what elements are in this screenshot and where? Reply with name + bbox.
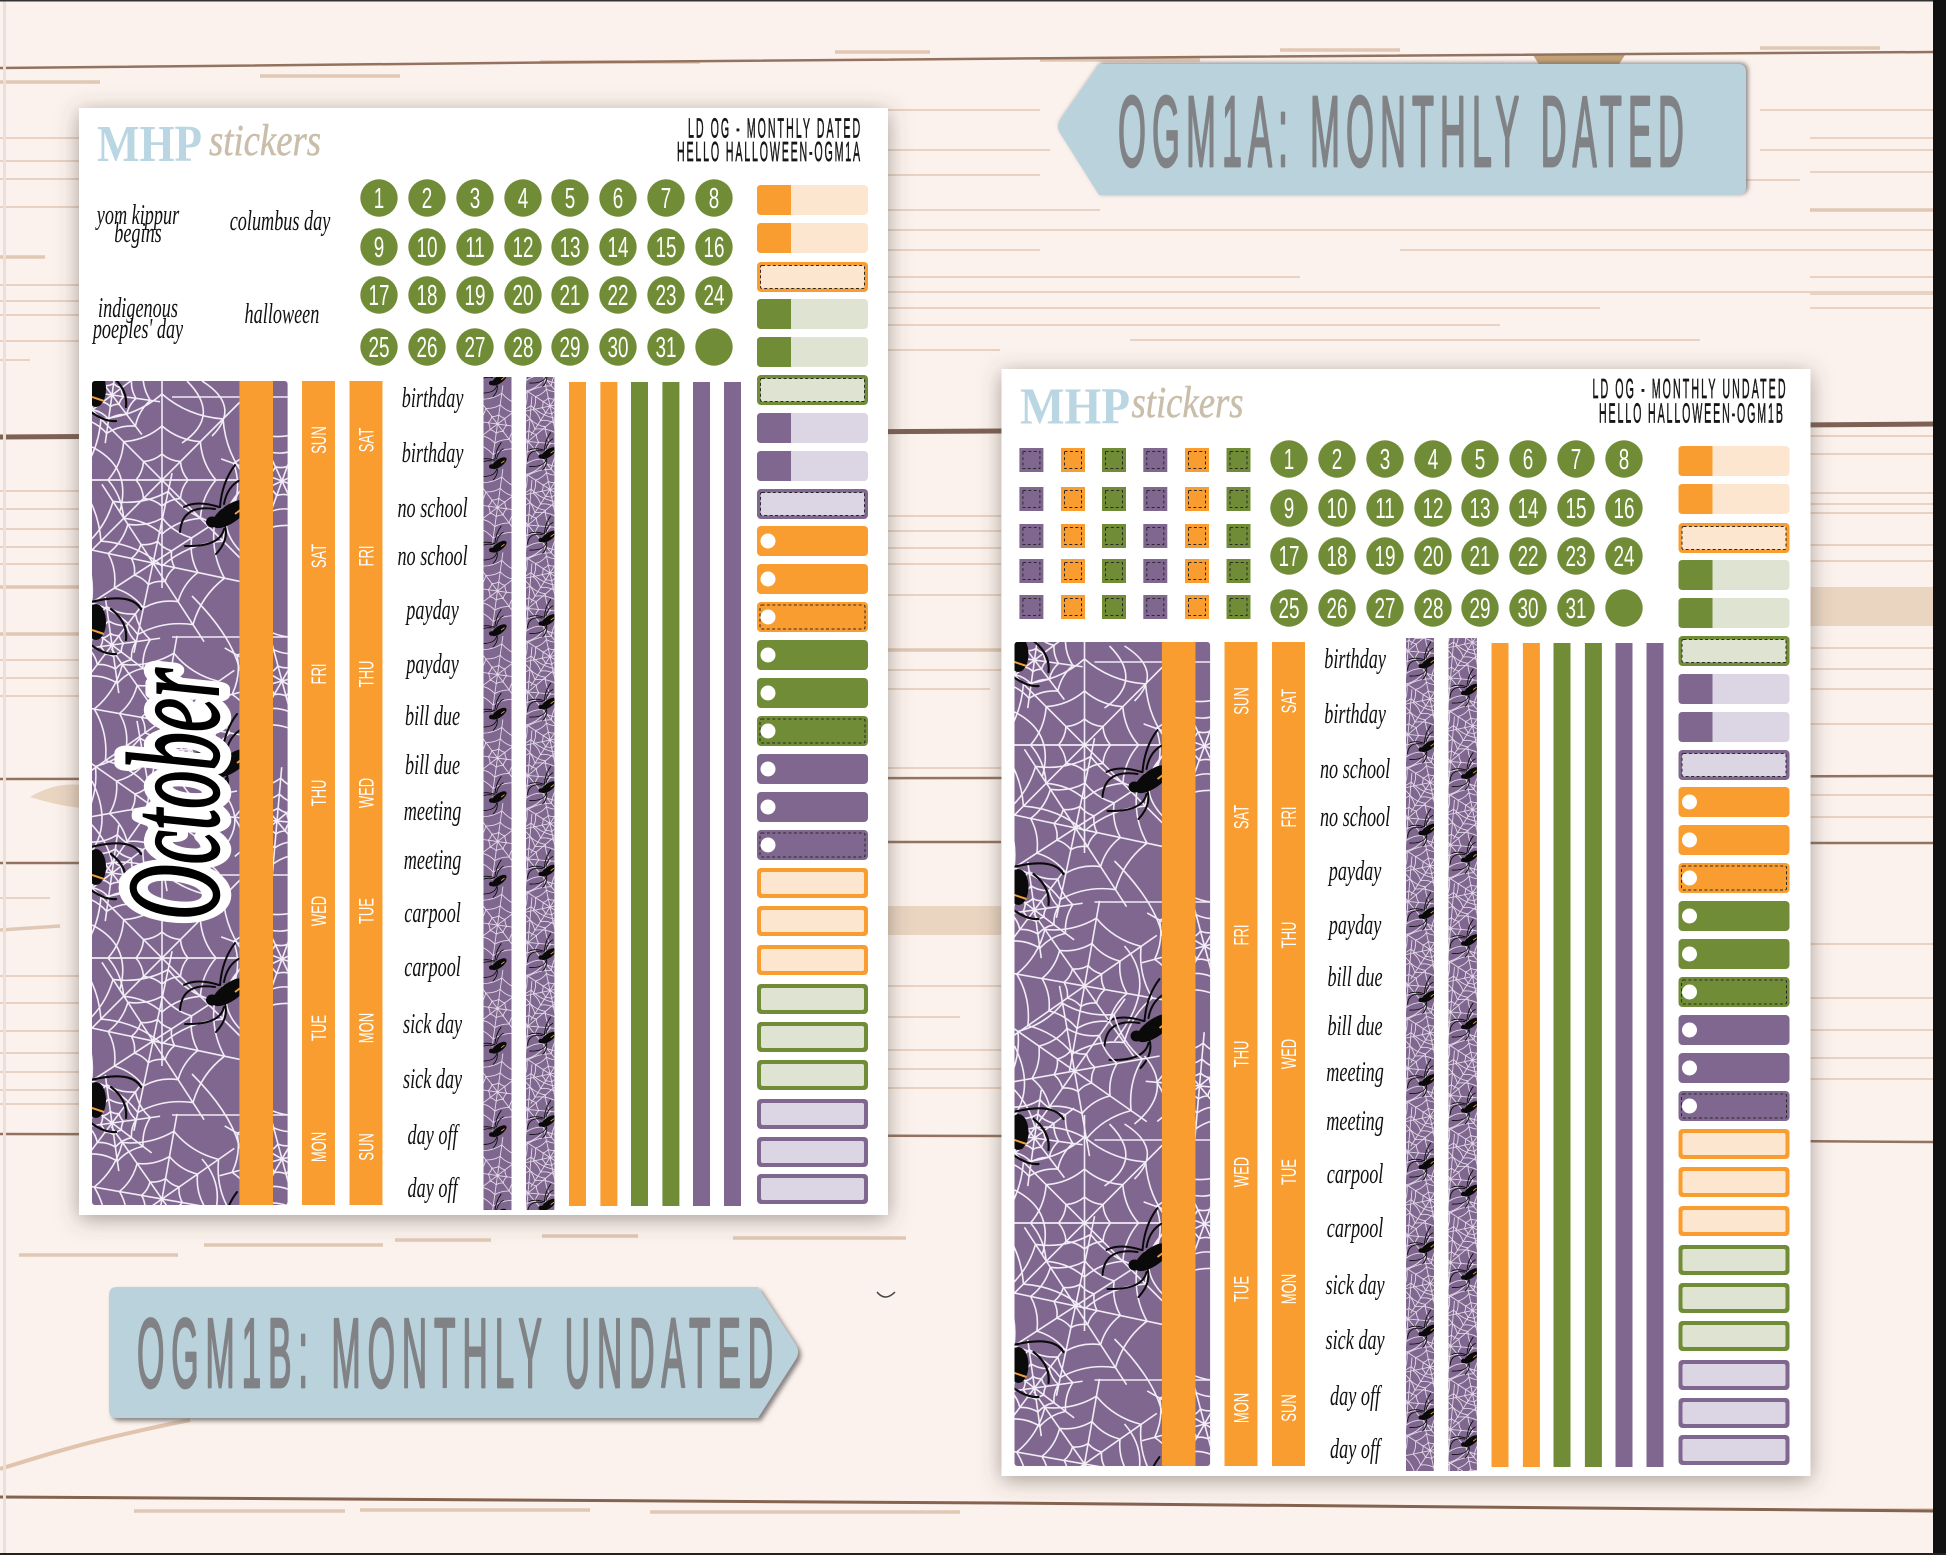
weekday strip: sunday start xyxy=(302,381,335,1205)
date circles 1 to 31: 7 xyxy=(661,183,671,215)
date circles 1 to 31: 20 xyxy=(513,280,533,312)
logo: MHP xyxy=(97,116,202,173)
event script labels: bill due xyxy=(405,750,460,781)
weekday strip: monday start: SUN xyxy=(1277,1394,1301,1422)
event script labels: carpool xyxy=(1327,1213,1384,1244)
weekday strip: monday start xyxy=(1272,642,1305,1466)
weekday strip: monday start: SAT xyxy=(354,428,378,452)
weekday strip: sunday start: TUE xyxy=(307,1015,331,1041)
weekday strip: sunday start: WED xyxy=(307,896,331,926)
logo: stickers xyxy=(209,116,321,165)
weekday strip: sunday start: SAT xyxy=(307,544,331,568)
event script labels: no school xyxy=(397,541,468,572)
weekday strip: sunday start: WED xyxy=(1229,1157,1253,1187)
date circles 1 to 31: 29 xyxy=(1470,593,1490,625)
sheet paper xyxy=(79,108,888,1215)
event script labels: bill due xyxy=(1328,962,1383,993)
date circles 1 to 31: 30 xyxy=(1518,593,1538,625)
weekday strip: monday start: TUE xyxy=(354,898,378,924)
weekday strip: sunday start: MON xyxy=(1229,1393,1253,1423)
date circles 1 to 31: 12 xyxy=(1423,493,1443,525)
date circles 1 to 31: 30 xyxy=(608,332,628,364)
date circles 1 to 31: 22 xyxy=(608,280,628,312)
weekday strip: sunday start: SUN xyxy=(1229,687,1253,715)
date circles 1 to 31: 10 xyxy=(417,232,437,264)
weekday strip: sunday start: FRI xyxy=(307,664,331,684)
holiday script labels: columbus day xyxy=(230,206,331,237)
date circles 1 to 31: 8 xyxy=(1619,444,1629,476)
sheet title: LD OG - MONTHLY DATED xyxy=(688,114,860,144)
spider web banner strip xyxy=(1014,642,1210,1466)
weekday strip: monday start: WED xyxy=(1277,1039,1301,1069)
event script labels: sick day xyxy=(403,1009,463,1040)
holiday script labels: poeples' day xyxy=(91,314,184,345)
date circles 1 to 31: 7 xyxy=(1571,444,1581,476)
event script labels: carpool xyxy=(404,952,461,983)
logo: MHP xyxy=(1020,378,1130,436)
date circles 1 to 31 xyxy=(360,179,733,366)
weekday strip: sunday start: SAT xyxy=(1229,805,1253,829)
date circles 1 to 31: 9 xyxy=(374,232,384,264)
weekday strip: monday start: THU xyxy=(1277,922,1301,948)
date circles 1 to 31: 6 xyxy=(613,183,623,215)
event script labels: bill due xyxy=(405,701,460,732)
date circles 1 to 31: 14 xyxy=(1518,493,1538,525)
label sticker column xyxy=(757,185,868,1204)
date circles 1 to 31: 3 xyxy=(470,183,480,215)
colored stripe strips xyxy=(569,382,741,1206)
event script labels: payday xyxy=(1327,856,1382,887)
event script labels: sick day xyxy=(1326,1270,1385,1301)
weekday strip: sunday start: THU xyxy=(307,780,331,806)
spider web banner strip with month name xyxy=(92,381,288,1205)
sheet title: LD OG - MONTHLY UNDATED xyxy=(1592,374,1786,405)
date circles 1 to 31: 6 xyxy=(1523,444,1533,476)
event script labels: payday xyxy=(405,649,459,680)
holiday script labels: yom kippur xyxy=(95,200,180,231)
event script labels: birthday xyxy=(1324,644,1386,675)
date circles 1 to 31: 27 xyxy=(465,332,485,364)
date circles 1 to 31: 20 xyxy=(1423,541,1443,573)
holiday script labels xyxy=(91,200,331,345)
weekday strip: sunday start: SUN xyxy=(307,426,331,454)
date circles 1 to 31: 18 xyxy=(417,280,437,312)
banner: OGM1A monthly dated: OGM1A: MONTHLY DATED xyxy=(1118,76,1684,187)
weekday strip: monday start: THU xyxy=(354,661,378,687)
event script labels: meeting xyxy=(1326,1106,1384,1137)
date circles 1 to 31: 15 xyxy=(656,232,676,264)
date circles 1 to 31: 11 xyxy=(465,232,485,264)
date circles 1 to 31: 23 xyxy=(656,280,676,312)
weekday strip: monday start: SAT xyxy=(1277,689,1301,713)
date circles 1 to 31: 28 xyxy=(1423,593,1443,625)
sheet title xyxy=(1592,374,1786,429)
weekday strip: monday start: MON xyxy=(1277,1274,1301,1304)
logo: stickers xyxy=(1132,378,1244,427)
date circles 1 to 31: 5 xyxy=(565,183,575,215)
date circles 1 to 31: 31 xyxy=(656,332,676,364)
weekday strip: sunday start: MON xyxy=(307,1132,331,1162)
date circles 1 to 31: 4 xyxy=(1428,444,1438,476)
date circles 1 to 31: 2 xyxy=(422,183,432,215)
date circles 1 to 31: 13 xyxy=(1470,493,1490,525)
date circles 1 to 31: 19 xyxy=(465,280,485,312)
sheet paper xyxy=(1002,369,1810,1476)
date circles 1 to 31: 1 xyxy=(1284,444,1294,476)
date circles 1 to 31: 24 xyxy=(1614,541,1635,573)
event script labels: day off xyxy=(1330,1434,1383,1465)
holiday script labels: begins xyxy=(114,218,162,249)
event script labels: payday xyxy=(1327,910,1382,941)
narrow web washi strips xyxy=(1406,638,1477,1471)
event script labels: birthday xyxy=(402,383,464,414)
weekday strip: monday start: FRI xyxy=(354,546,378,567)
date circles 1 to 31: 29 xyxy=(560,332,580,364)
date circles 1 to 31: 21 xyxy=(1470,541,1490,573)
event script labels: sick day xyxy=(1326,1325,1385,1356)
date circles 1 to 31: 22 xyxy=(1518,541,1538,573)
weekday strip: sunday start: TUE xyxy=(1229,1276,1253,1302)
date circles 1 to 31: 17 xyxy=(369,280,389,312)
event script labels: day off xyxy=(1330,1381,1383,1412)
date circles 1 to 31: 8 xyxy=(709,183,719,215)
weekday strip: sunday start: FRI xyxy=(1229,925,1253,945)
weekday strip: monday start: WED xyxy=(354,778,378,808)
label sticker column xyxy=(1678,446,1790,1465)
date circles 1 to 31: 23 xyxy=(1566,541,1586,573)
date circles 1 to 31: 27 xyxy=(1375,593,1395,625)
event script labels: birthday xyxy=(402,438,464,469)
event script labels: payday xyxy=(405,595,459,626)
holiday script labels: halloween xyxy=(245,299,319,330)
weekday strip: monday start: SUN xyxy=(354,1133,378,1161)
date circles 1 to 31: 16 xyxy=(1614,493,1635,525)
weekday strip: sunday start xyxy=(1224,642,1258,1466)
sheet title: HELLO HALLOWEEN-OGM1B xyxy=(1599,399,1783,429)
date circles 1 to 31: 26 xyxy=(417,332,437,364)
sheet title xyxy=(677,114,861,168)
event script labels: birthday xyxy=(1324,699,1386,730)
month name xyxy=(100,668,247,920)
event script labels: meeting xyxy=(1326,1057,1384,1088)
date circles 1 to 31: 10 xyxy=(1327,493,1347,525)
event script labels: no school xyxy=(1320,754,1391,785)
event script labels: day off xyxy=(408,1120,460,1151)
panel: sheet OGM1A monthly dated xyxy=(44,108,888,1303)
date circles 1 to 31: 1 xyxy=(374,183,384,215)
date circles 1 to 31: 31 xyxy=(1566,593,1586,625)
month name: October xyxy=(100,668,247,920)
date circles 1 to 31: 11 xyxy=(1375,493,1395,525)
event script labels xyxy=(397,383,468,1204)
date circles 1 to 31: 28 xyxy=(513,332,533,364)
event script labels: carpool xyxy=(1327,1159,1384,1190)
date circles 1 to 31: 26 xyxy=(1327,593,1347,625)
weekday strip: monday start xyxy=(350,381,382,1205)
weekday strip: monday start: FRI xyxy=(1277,807,1301,828)
date circles 1 to 31: 21 xyxy=(560,280,580,312)
month name: October xyxy=(100,668,247,920)
date circles 1 to 31: 15 xyxy=(1566,493,1586,525)
banner: OGM1B monthly undated: OGM1B: MONTHLY UNDATED xyxy=(137,1298,773,1408)
date circles 1 to 31: 17 xyxy=(1279,541,1299,573)
sheet title: HELLO HALLOWEEN-OGM1A xyxy=(677,137,861,168)
event script labels: day off xyxy=(408,1173,460,1204)
date circles 1 to 31: 12 xyxy=(513,232,533,264)
date circles 1 to 31: 13 xyxy=(560,232,580,264)
panel: sheet OGM1B monthly undated xyxy=(967,369,1810,1555)
event script labels: carpool xyxy=(404,898,461,929)
date circles 1 to 31: 14 xyxy=(608,232,628,264)
date circles 1 to 31: 16 xyxy=(704,232,725,264)
date circles 1 to 31: 3 xyxy=(1380,444,1390,476)
event script labels: no school xyxy=(397,493,468,524)
event script labels: meeting xyxy=(404,796,462,827)
date circles 1 to 31: 2 xyxy=(1332,444,1342,476)
date circles 1 to 31: 9 xyxy=(1284,493,1294,525)
logo xyxy=(97,116,321,173)
narrow web washi strips xyxy=(484,377,554,1210)
event script labels: meeting xyxy=(404,845,462,876)
event script labels: sick day xyxy=(403,1064,463,1095)
event script labels: no school xyxy=(1320,802,1391,833)
holiday script labels: indigenous xyxy=(98,293,178,324)
logo xyxy=(1020,378,1244,436)
date circles 1 to 31 xyxy=(1270,440,1643,627)
event script labels xyxy=(1320,644,1391,1465)
date circles 1 to 31: 25 xyxy=(1279,593,1299,625)
checkbox squares grid xyxy=(1019,448,1250,619)
weekday strip: monday start: MON xyxy=(354,1013,378,1043)
date circles 1 to 31: 19 xyxy=(1375,541,1395,573)
date circles 1 to 31: 18 xyxy=(1327,541,1347,573)
event script labels: bill due xyxy=(1328,1011,1383,1042)
colored stripe strips xyxy=(1492,643,1664,1467)
weekday strip: sunday start: THU xyxy=(1229,1041,1253,1067)
weekday strip: monday start: TUE xyxy=(1277,1159,1301,1185)
date circles 1 to 31: 25 xyxy=(369,332,389,364)
date circles 1 to 31: 4 xyxy=(518,183,528,215)
date circles 1 to 31: 5 xyxy=(1475,444,1485,476)
date circles 1 to 31: 24 xyxy=(704,280,725,312)
